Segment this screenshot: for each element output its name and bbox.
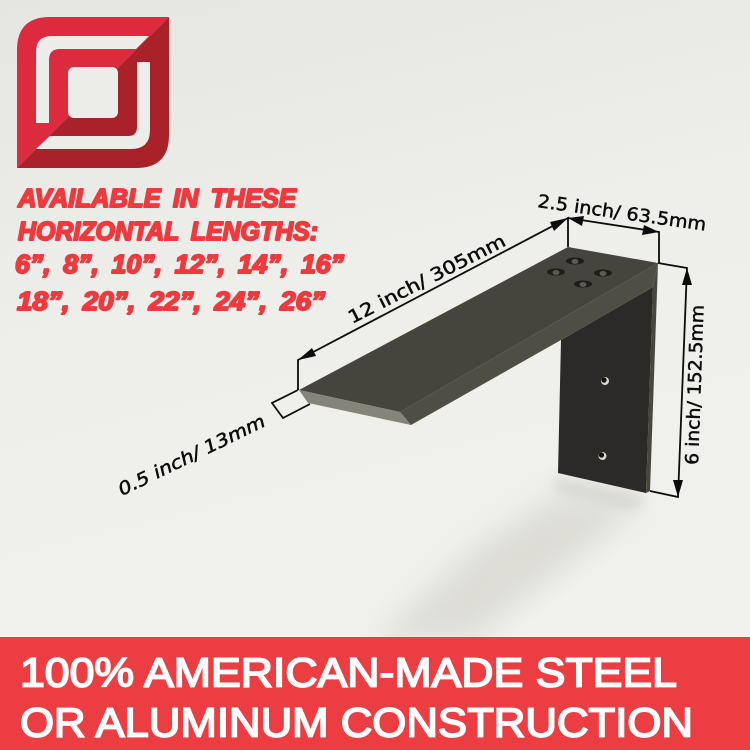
leg side edge (646, 263, 658, 493)
vertical leg (558, 287, 653, 493)
bracket (299, 247, 658, 493)
logo (17, 17, 169, 168)
banner text: OR ALUMINUM CONSTRUCTION (20, 700, 693, 746)
arm front band (400, 263, 658, 425)
arrowheads (298, 216, 692, 497)
dimension labels: 0.5 inch/ 13mm (115, 411, 269, 500)
red text: available lengths: 18”, 20”, 22”, 24”, 26” (17, 288, 325, 316)
mounting holes top (547, 258, 612, 288)
dimension labels: 12 inch/ 305mm (345, 231, 509, 328)
arm end bevel (299, 390, 411, 425)
red text: available lengths: AVAILABLE IN THESE (17, 185, 297, 213)
red text: available lengths: HORIZONTAL LENGTHS: (18, 218, 318, 246)
bottom banner (0, 637, 750, 750)
red text: available lengths (15, 185, 344, 316)
dimension labels: 2.5 inch/ 63.5mm (536, 191, 708, 236)
red text: available lengths: 6”, 8”, 10”, 12”, 14”, 16” (15, 251, 344, 279)
horizontal arm top face (299, 247, 658, 412)
banner text: 100% AMERICAN-MADE STEEL (20, 650, 677, 696)
dimension labels (115, 191, 709, 500)
mounting holes leg (598, 377, 609, 460)
bracket cast shadow (375, 475, 646, 640)
dimension lines (272, 218, 687, 497)
banner text (20, 650, 693, 746)
dimension labels: 6 inch/ 152.5mm (682, 305, 709, 465)
